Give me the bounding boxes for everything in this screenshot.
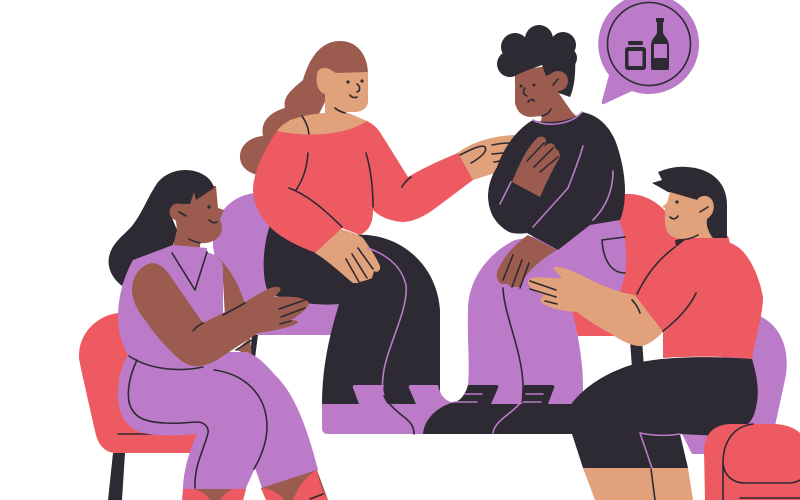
ear [548,71,568,91]
chest hand [512,137,560,197]
lap hand [315,229,380,283]
far arm [215,255,252,356]
dress lines [128,252,305,488]
icon: bottle [651,18,669,70]
face and neck [277,68,368,150]
face details [302,79,364,136]
person: center woman [240,41,520,434]
purple trousers [468,218,626,410]
left chair [79,313,197,500]
hair [652,167,727,238]
center sofa [213,193,345,358]
ear [170,204,186,220]
face [170,185,224,250]
boots [423,385,590,434]
curly hair [497,25,577,77]
far right purple chair [675,314,787,454]
red top [253,121,473,253]
trouser seam [503,288,523,402]
knee hand [497,235,557,288]
icon: jar [625,41,646,70]
shorts [564,357,758,468]
hair [240,41,368,176]
near arm and hand [132,263,309,366]
face [515,65,585,125]
person: left woman [79,170,328,500]
face details [179,205,217,243]
person: right man [528,167,800,500]
backpack [704,424,800,500]
tan legs [583,468,693,500]
face details [520,79,558,116]
face [662,192,714,239]
legs and shoes [182,470,328,500]
reaching hand [456,135,520,180]
arm and hand [528,267,663,346]
hand lines [460,143,509,163]
face details [670,200,708,240]
hair back [555,55,575,97]
red shirt [635,236,763,359]
person: seated man in black top [423,25,626,434]
hair [109,170,214,286]
trouser seam [368,248,406,396]
speech bubble with bottle and jar icon [598,0,699,104]
pocket [602,237,625,273]
purple boots [322,385,456,434]
purple dress [118,245,318,490]
dark trousers [264,225,440,405]
arm lines [530,247,696,331]
shorts seam [640,433,680,468]
black top [488,112,625,250]
top seams [500,112,613,227]
top seams [289,153,411,227]
neck gap [675,240,685,247]
right chair [566,194,682,368]
